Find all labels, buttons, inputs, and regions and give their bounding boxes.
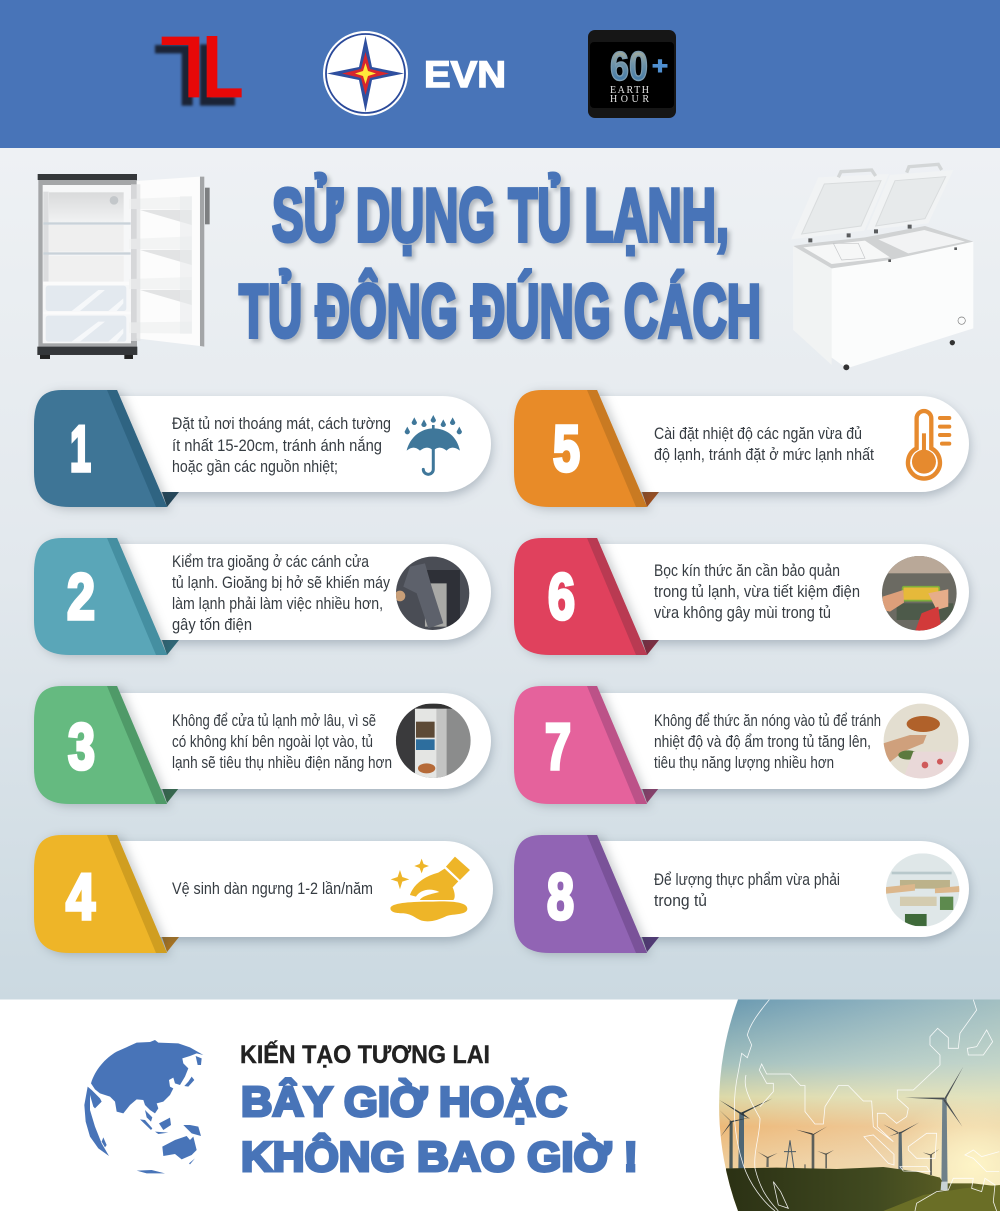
photo: hot dish in fridge [883, 703, 960, 780]
logo: Earth Hour 60+: 60 [610, 43, 648, 89]
number 4: 4 [66, 860, 95, 933]
illustration: open refrigerator [37, 174, 210, 359]
header band [0, 0, 1000, 148]
tip text 3: Không để cửa tủ lạnh mở lâu, vì sẽ [172, 712, 376, 730]
logo: Earth Hour 60+: EARTH [610, 85, 649, 96]
title: SỬ DỤNG TỦ LẠNH, [272, 173, 729, 257]
slogan: BÂY GIỜ HOẶC [241, 1077, 567, 1125]
tip text 6: Bọc kín thức ăn cần bảo quản [654, 562, 840, 580]
tip card 3 [34, 686, 491, 804]
illustration: chest freezer [791, 164, 973, 370]
globe [84, 1040, 203, 1173]
number 1: 1 [70, 412, 91, 485]
tip text 2: tủ lạnh. Gioăng bị hở sẽ khiến máy [172, 574, 391, 592]
tip text 8: Để lượng thực phẩm vừa phải [654, 871, 840, 889]
number 8: 8 [547, 860, 574, 933]
slogan: KIẾN TẠO TƯƠNG LAI [240, 1040, 490, 1069]
logo: Earth Hour 60+: HOUR [610, 94, 649, 105]
tip text 2: Kiểm tra gioăng ở các cánh cửa [172, 553, 370, 571]
icon: umbrella with rain [405, 415, 462, 474]
tip text 5: độ lạnh, tránh đặt ở mức lạnh nhất [654, 446, 874, 464]
tip text 5: Cài đặt nhiệt độ các ngăn vừa đủ [654, 425, 862, 443]
photo: stocked fridge [883, 853, 960, 928]
tip card 6 [514, 538, 969, 655]
tip text 8: trong tủ [654, 892, 707, 910]
map outlines [734, 1000, 999, 1211]
photo: wrapped food box [880, 555, 960, 632]
tip text 8 [654, 871, 840, 910]
tip card 1 [34, 390, 491, 507]
tip text 5 [654, 425, 874, 464]
footer band [0, 1000, 1000, 1211]
tip text 3 [172, 712, 392, 772]
tip card 8 [514, 835, 969, 953]
photo: wind turbines in earth shape [718, 1000, 1000, 1211]
tip text 1: Đặt tủ nơi thoáng mát, cách tường [172, 415, 391, 433]
slogan: KHÔNG BAO GIỜ ! [241, 1132, 638, 1180]
tip text 2: gây tốn điện [172, 616, 252, 634]
tip text 3: lạnh sẽ tiêu thụ nhiều điện năng hơn [172, 754, 392, 772]
page background [0, 148, 1000, 1000]
logo: Earth Hour 60+ [588, 30, 676, 118]
photo: door gasket [396, 556, 470, 630]
hills [726, 1167, 1000, 1211]
turbines [719, 1067, 963, 1190]
tip text 7 [654, 712, 881, 772]
tip text 2 [172, 553, 391, 634]
logo: EVN: EVN [424, 54, 506, 95]
tip text 7: Không để thức ăn nóng vào tủ để tránh [654, 712, 881, 730]
tip text 6: trong tủ lạnh, vừa tiết kiệm điện [654, 583, 860, 601]
tip text 1 [172, 415, 391, 476]
number 2: 2 [67, 560, 95, 633]
logo: TL [155, 36, 242, 106]
tip text 2: làm lạnh phải làm việc nhiều hơn, [172, 595, 383, 613]
tip text 3: có không khí bên ngoài lọt vào, tủ [172, 733, 373, 751]
tip card 4 [34, 835, 493, 953]
logo: Earth Hour 60+: + [652, 53, 668, 80]
tip card 7 [514, 686, 969, 804]
tip text 4: Vệ sinh dàn ngưng 1-2 lần/năm [172, 880, 373, 898]
number 6: 6 [548, 560, 575, 633]
logo: EVN [324, 32, 506, 116]
tip card 2 [34, 538, 491, 655]
icon: thermometer [908, 411, 949, 479]
tip text 1: hoặc gần các nguồn nhiệt; [172, 458, 338, 476]
tip text 6: vừa không gây mùi trong tủ [654, 604, 831, 622]
tip text 7: tiêu thụ năng lượng nhiều hơn [654, 754, 834, 772]
tip text 7: nhiệt độ và độ ẩm trong tủ tăng lên, [654, 733, 871, 751]
tip text 6 [654, 562, 860, 622]
tip text 1: ít nhất 15-20cm, tránh ánh nắng [172, 436, 382, 455]
icon: hand cleaning [390, 857, 470, 921]
title [239, 173, 761, 353]
number 3: 3 [68, 710, 95, 783]
photo: open fridge door [396, 703, 471, 778]
number 7: 7 [545, 710, 571, 783]
tip card 5 [514, 390, 969, 507]
slogan [240, 1040, 638, 1180]
number 5: 5 [553, 412, 580, 485]
